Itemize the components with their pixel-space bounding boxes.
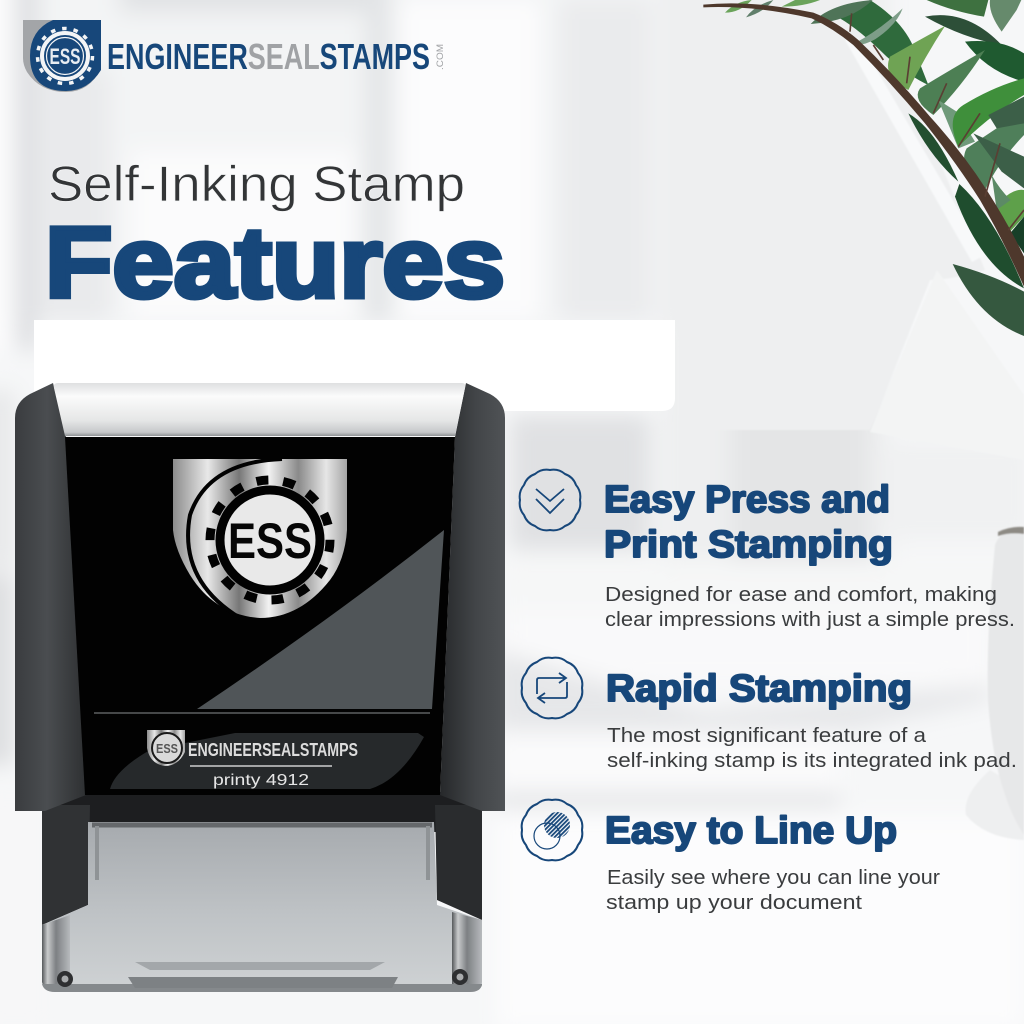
description — [607, 725, 1017, 772]
lower reflection — [110, 733, 424, 789]
heading — [604, 479, 893, 566]
coffee mug — [966, 527, 1024, 840]
description — [606, 867, 940, 914]
title line one: Self-Inking Stamp — [48, 156, 465, 212]
feature: easy press — [520, 470, 1015, 631]
stamp left side — [15, 383, 86, 811]
stamp — [15, 383, 505, 992]
logo — [23, 20, 445, 92]
model label: printy 4912 — [213, 772, 309, 789]
description: The most significant feature of a — [607, 725, 927, 747]
title — [45, 156, 505, 319]
description: stamp up your document — [606, 892, 863, 914]
heading: Print Stamping — [604, 524, 893, 566]
stamp black face — [65, 437, 455, 795]
icon: double chevron — [520, 470, 580, 530]
heading: Easy Press and — [604, 479, 890, 521]
logo shield — [23, 20, 101, 92]
description: clear impressions with just a simple press. — [605, 609, 1015, 631]
logo .com: .COM — [435, 44, 445, 70]
feature: rapid stamping — [522, 658, 1017, 772]
feature: easy to line up — [522, 800, 940, 914]
logo shield: ESS — [50, 44, 80, 69]
clear window — [42, 822, 482, 992]
description: Easily see where you can line your — [607, 867, 940, 889]
small face logo: ESS — [156, 741, 178, 756]
stamp lower base — [42, 792, 482, 992]
face brand text: ENGINEERSEALSTAMPS — [188, 740, 358, 760]
title line two: Features — [45, 207, 505, 319]
silver shield logo — [173, 459, 347, 618]
icon: repeat arrows — [522, 658, 582, 718]
stamp top clear window — [54, 383, 465, 436]
stamp right side — [440, 383, 505, 811]
logo wordmark: ENGINEERSEALSTAMPS — [107, 36, 430, 77]
description: Designed for ease and comfort, making — [605, 584, 997, 606]
face reflection — [197, 530, 444, 709]
plant — [703, 0, 1024, 336]
heading: Easy to Line Up — [605, 810, 897, 852]
face rule — [190, 765, 332, 767]
description — [605, 584, 1015, 631]
heading: Rapid Stamping — [606, 668, 912, 710]
seal letters: ESS — [228, 513, 312, 569]
monitor base panel — [34, 320, 675, 411]
small face logo — [147, 730, 185, 766]
monitor back curve — [680, 0, 985, 430]
description: self-inking stamp is its integrated ink pad. — [607, 750, 1017, 772]
divider — [94, 712, 430, 714]
icon: overlapping circles — [522, 800, 582, 860]
